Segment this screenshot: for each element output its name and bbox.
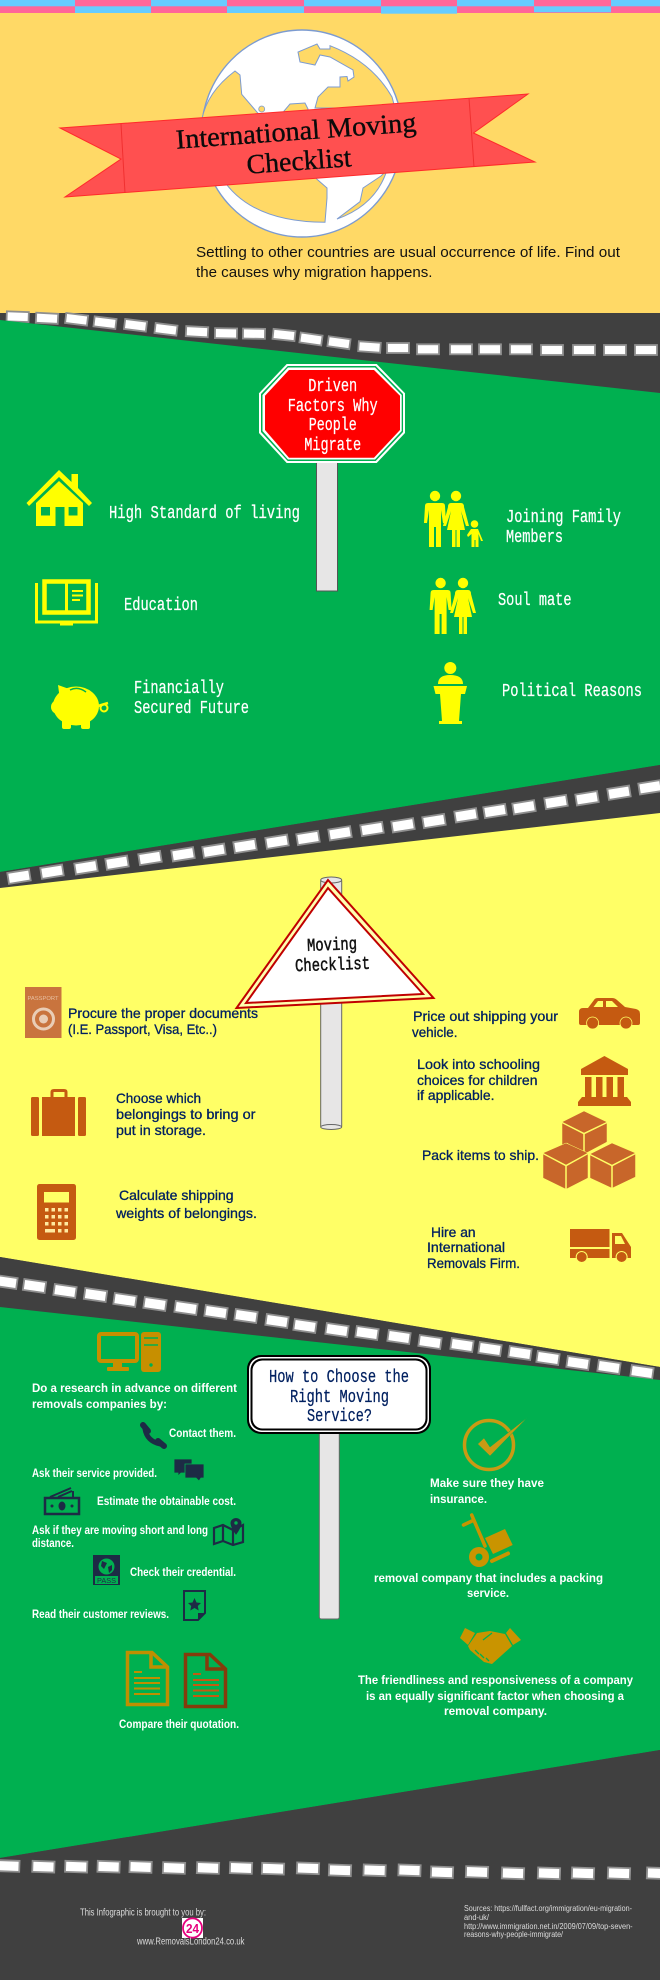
- text: price vehicle: Price out shipping your: [413, 1008, 558, 1024]
- icon: passport: [25, 987, 62, 1038]
- label: joining family: Members: [506, 528, 563, 548]
- text: hire firm: Removals Firm.: [427, 1255, 520, 1271]
- text: research intro: [32, 1383, 237, 1411]
- text: calculate weights: Calculate shipping: [119, 1187, 234, 1203]
- service sign heading: Right Moving: [290, 1388, 389, 1408]
- text: pack items: Pack items to ship.: [422, 1147, 539, 1163]
- text: insurance: Make sure they have: [430, 1478, 544, 1490]
- text: packing: service.: [467, 1588, 509, 1600]
- icon: quotation document one: [128, 1652, 168, 1704]
- top checker stripe: [0, 0, 660, 14]
- text: contact: Contact them.: [169, 1428, 236, 1440]
- icon: family: [424, 491, 483, 547]
- website: www.RemovalsLondon24.co.uk: [136, 1936, 245, 1948]
- icon: house: [26, 470, 92, 526]
- stop sign heading: [259, 364, 405, 463]
- text: calculate weights: [115, 1187, 257, 1221]
- icon: calculator: [37, 1184, 76, 1240]
- label: financially secured future: [134, 679, 249, 719]
- icon: quotation document two: [186, 1654, 226, 1706]
- title: Checklist: [245, 141, 353, 180]
- triangle sign heading: [236, 880, 434, 1008]
- icon: star document: [184, 1591, 205, 1620]
- icon: computer: [99, 1332, 161, 1372]
- text: schooling: if applicable.: [417, 1087, 494, 1103]
- intro text: [196, 244, 621, 281]
- label: joining family: [506, 508, 621, 548]
- icon: check mark: [464, 1417, 528, 1470]
- icon: couple: [430, 578, 476, 634]
- service sign heading: How to Choose the: [269, 1368, 409, 1388]
- sources: and-uk/: [464, 1913, 490, 1922]
- stop sign heading: Driven: [308, 377, 357, 397]
- text: schooling: Look into schooling: [417, 1056, 540, 1072]
- text: calculate weights: weights of belongings.: [115, 1205, 257, 1221]
- icon: chat: [174, 1459, 204, 1481]
- service sign heading: Service?: [307, 1407, 372, 1427]
- text: choose belongings: [116, 1090, 256, 1138]
- icon: pass: PASS: [97, 1576, 116, 1585]
- panel: footer: [0, 1750, 660, 1980]
- triangle sign heading: Checklist: [295, 955, 370, 977]
- intro text: the causes why migration happens.: [196, 264, 432, 281]
- icon: phone: [143, 1425, 164, 1446]
- icon: globe: [202, 30, 402, 237]
- sources: reasons-why-people-immigrate/: [464, 1930, 564, 1939]
- label: joining family: Joining Family: [506, 508, 621, 528]
- label: financially secured future: Financially: [134, 679, 224, 699]
- text: short and long distance: distance.: [32, 1538, 74, 1550]
- text: service provided: Ask their service provided.: [32, 1468, 157, 1480]
- sign post: [321, 877, 342, 1130]
- text: hire firm: Hire an: [431, 1224, 476, 1240]
- label: education: Education: [124, 596, 198, 616]
- icon: pass: [93, 1555, 120, 1585]
- text: friendliness: removal company.: [444, 1706, 547, 1718]
- icon: book: [36, 582, 96, 624]
- text: credential: Check their credential.: [130, 1567, 236, 1579]
- text: choose belongings: put in storage.: [116, 1122, 206, 1138]
- text: short and long distance: [32, 1525, 208, 1550]
- icon: car: [579, 998, 640, 1029]
- title: International Moving: [175, 106, 418, 155]
- sources: [464, 1904, 633, 1939]
- text: packing: [374, 1573, 603, 1600]
- sources: Sources: https://fullfact.org/immigration/eu-migration-: [464, 1904, 632, 1913]
- panel: driven factors: [0, 320, 660, 872]
- road 4 dashes: [0, 1860, 660, 1879]
- sign post: [316, 458, 338, 591]
- road 2: [0, 765, 660, 888]
- text: procure: (I.E. Passport, Visa, Etc..): [68, 1021, 217, 1037]
- icon: hand truck: [464, 1515, 513, 1567]
- text: hire firm: International: [427, 1239, 505, 1255]
- logo: 24: [186, 1921, 200, 1936]
- text: short and long distance: Ask if they are moving short and long: [32, 1525, 208, 1537]
- stop sign heading: Factors Why: [288, 397, 378, 417]
- text: compare: Compare their quotation.: [119, 1719, 239, 1731]
- panel: moving checklist: [0, 813, 660, 1367]
- icon: boxes: [543, 1111, 636, 1189]
- text: choose belongings: belongings to bring or: [116, 1106, 256, 1122]
- text: schooling: choices for children: [417, 1072, 538, 1088]
- text: schooling: [417, 1056, 540, 1103]
- icon: bank: [578, 1056, 631, 1106]
- title: [175, 106, 418, 180]
- icon: piggy bank: [51, 685, 108, 729]
- text: reviews: Read their customer reviews.: [32, 1609, 169, 1621]
- icon: podium: [434, 662, 467, 724]
- title ribbon: [60, 94, 535, 197]
- text: procure: Procure the proper documents: [68, 1005, 258, 1021]
- label: financially secured future: Secured Future: [134, 699, 249, 719]
- sources: http://www.immigration.net.in/2009/07/09/top-seven-: [464, 1922, 633, 1931]
- text: friendliness: is an equally significant factor when choosing a: [366, 1691, 625, 1703]
- text: estimate: Estimate the obtainable cost.: [97, 1496, 236, 1508]
- panel: header background: [0, 0, 660, 314]
- stop sign heading: People: [309, 416, 357, 436]
- icon: passport: PASSPORT: [28, 996, 59, 1002]
- text: friendliness: [358, 1675, 634, 1718]
- text: research intro: removals companies by:: [32, 1399, 167, 1411]
- road 3: [0, 1257, 660, 1380]
- icon: truck: [570, 1229, 631, 1262]
- road 1: [0, 311, 660, 393]
- label: high standard: High Standard of living: [109, 504, 300, 524]
- logo: [182, 1918, 203, 1938]
- icon: suitcase: [31, 1090, 86, 1136]
- text: price vehicle: vehicle.: [412, 1024, 458, 1040]
- text: choose belongings: Choose which: [116, 1090, 201, 1106]
- text: insurance: insurance.: [430, 1494, 487, 1506]
- stop sign heading: Migrate: [304, 436, 361, 456]
- text: research intro: Do a research in advance on different: [32, 1383, 237, 1395]
- intro text: Settling to other countries are usual occurrence of life. Find out: [196, 244, 621, 261]
- text: packing: removal company that includes a packing: [374, 1573, 603, 1585]
- text: procure: [68, 1005, 258, 1037]
- text: price vehicle: [412, 1008, 558, 1040]
- icon: map: [214, 1518, 243, 1545]
- service sign heading: [247, 1355, 431, 1434]
- text: friendliness: The friendliness and responsiveness of a company: [358, 1675, 634, 1687]
- panel: choosing a moving service: [0, 1307, 660, 1858]
- sign post: [319, 1432, 339, 1619]
- text: hire firm: [427, 1224, 520, 1271]
- text: insurance: [430, 1478, 544, 1506]
- label: soul mate: Soul mate: [498, 591, 572, 611]
- credit line: This Infographic is brought to you by:: [80, 1908, 206, 1918]
- triangle sign heading: Moving: [307, 935, 357, 957]
- icon: money: [45, 1488, 79, 1514]
- icon: handshake: [460, 1628, 521, 1664]
